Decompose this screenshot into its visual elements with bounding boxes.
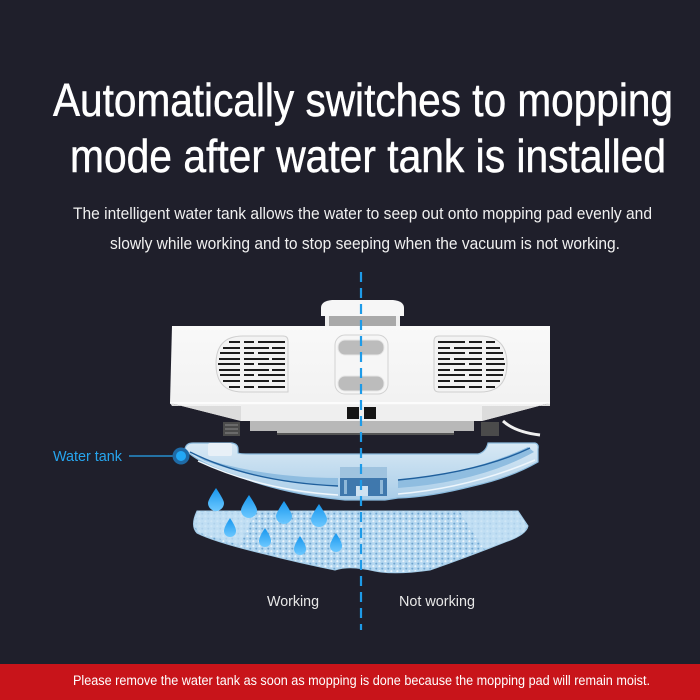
warning banner xyxy=(0,664,700,700)
body shell xyxy=(170,326,550,421)
lidar turret xyxy=(321,300,404,327)
water tank callout xyxy=(53,448,190,465)
centre dashed divider xyxy=(360,272,362,630)
working label: Working xyxy=(267,593,319,610)
underside wheels and brush xyxy=(223,420,540,436)
description: slowly while working and to stop seeping when the vacuum is not working. xyxy=(110,234,620,253)
warning banner: Please remove the water tank as soon as mopping is done because the mopping pad will remain moist. xyxy=(73,673,650,688)
centre panel with buttons xyxy=(335,335,388,394)
right vent xyxy=(434,336,507,392)
sensor windows xyxy=(347,407,376,419)
not working label: Not working xyxy=(399,593,475,610)
robot vacuum xyxy=(170,300,550,436)
water tank xyxy=(185,443,538,500)
water drops xyxy=(208,488,342,555)
description xyxy=(73,204,652,253)
title xyxy=(53,74,673,182)
description: The intelligent water tank allows the water to seep out onto mopping pad evenly and xyxy=(73,204,652,223)
water tank callout: Water tank xyxy=(53,449,123,465)
mopping pad xyxy=(194,511,528,573)
left vent xyxy=(216,336,288,392)
